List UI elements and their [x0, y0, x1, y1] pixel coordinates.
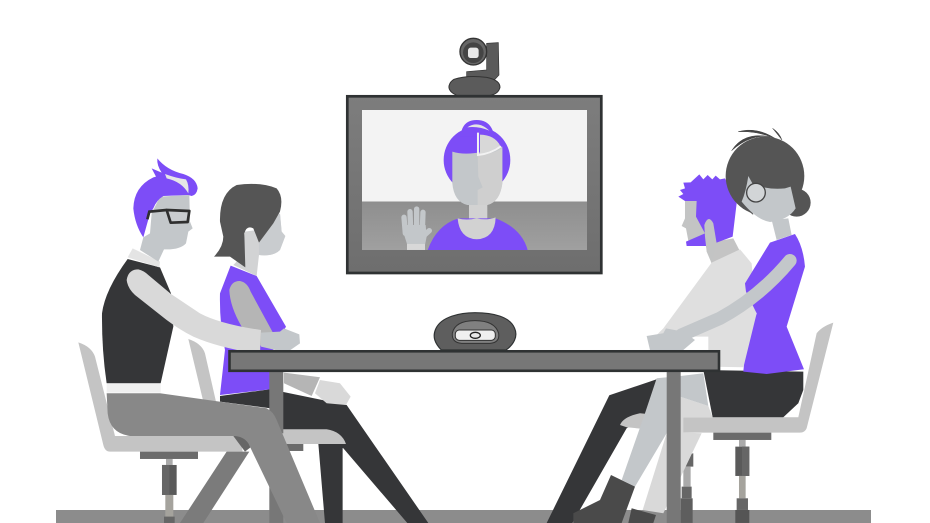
woman head — [726, 128, 811, 222]
man dark leg — [547, 379, 657, 523]
woman head — [214, 184, 285, 276]
man chair — [78, 342, 249, 523]
back light leg — [643, 397, 713, 513]
speakerphone — [434, 313, 516, 350]
woman lower body — [220, 266, 428, 523]
man body — [102, 248, 320, 523]
floor — [56, 510, 871, 523]
chair — [620, 323, 833, 523]
woman chair back — [188, 339, 216, 402]
front grey leg — [622, 373, 708, 487]
man head — [133, 158, 198, 262]
left group: man and woman — [78, 158, 428, 523]
far chair base — [681, 453, 693, 523]
remote participant — [403, 120, 528, 250]
man head — [678, 174, 737, 263]
boots — [573, 475, 656, 523]
monitor — [347, 96, 601, 273]
screen background — [362, 110, 587, 202]
camera — [449, 38, 500, 95]
right group: man and woman — [547, 128, 833, 523]
waving hand — [403, 209, 429, 250]
skirt — [703, 370, 803, 417]
man torso — [655, 238, 757, 367]
table — [230, 351, 719, 523]
woman torso — [647, 218, 805, 374]
